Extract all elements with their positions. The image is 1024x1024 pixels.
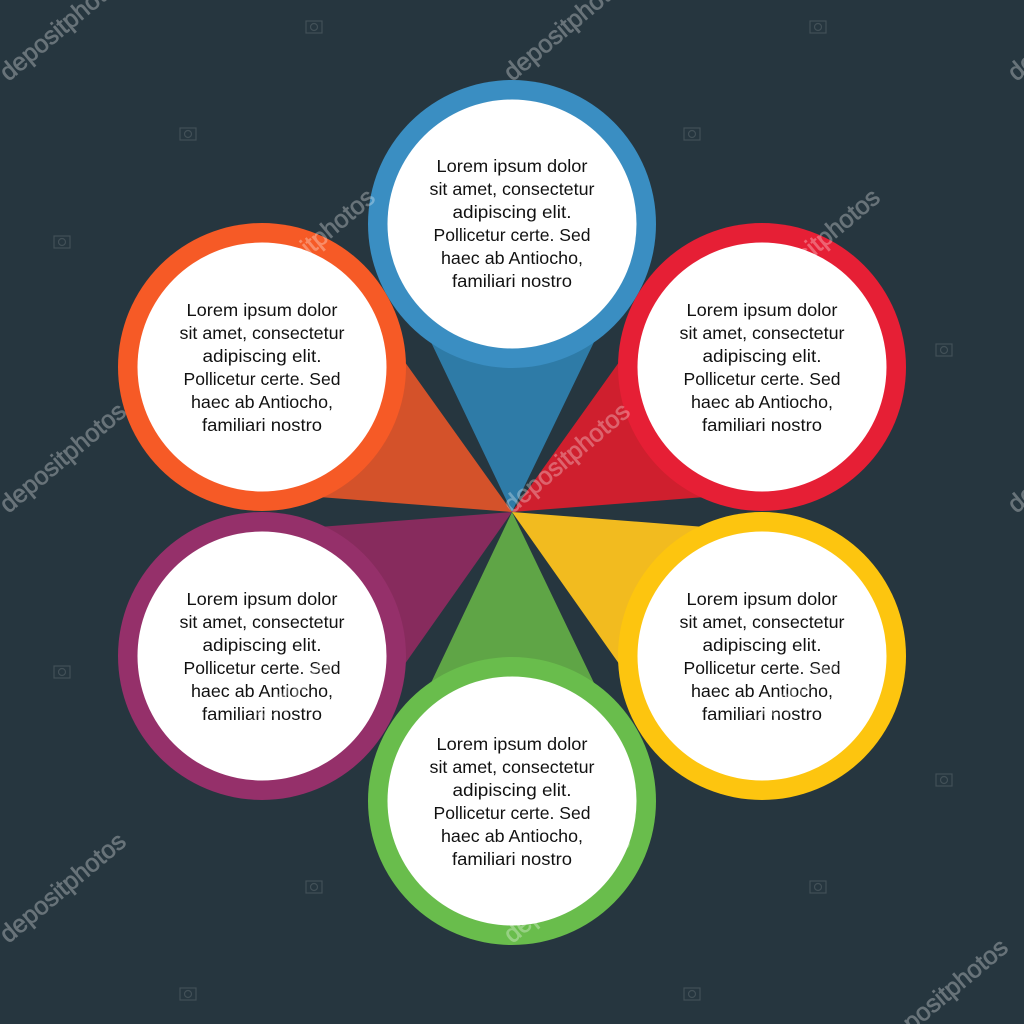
text: purple circle (180, 589, 345, 724)
text: red circle: haec ab Antiocho, (691, 392, 833, 412)
text: green circle: haec ab Antiocho, (441, 826, 583, 846)
wedge: yellow (512, 512, 705, 668)
text: red circle (680, 300, 845, 435)
text: red circle: Lorem ipsum dolor (686, 300, 838, 320)
text: yellow circle (680, 589, 845, 724)
text: red circle: familiari nostro (702, 415, 822, 435)
wedge: orange (319, 358, 512, 512)
circle: blue (368, 80, 656, 368)
wedge: red (512, 358, 705, 512)
watermarks: depositphotos (243, 183, 380, 305)
text: green circle: Pollicetur certe. Sed (434, 803, 590, 823)
text: purple circle: adipiscing elit. (202, 635, 322, 655)
text: orange circle: adipiscing elit. (202, 346, 322, 366)
wedge: blue (430, 340, 595, 512)
watermarks: depositphotos (749, 611, 886, 733)
text: purple circle: sit amet, consectetur (180, 612, 345, 632)
text: orange circle (180, 300, 345, 435)
text: purple circle: Lorem ipsum dolor (186, 589, 338, 609)
text: yellow circle: haec ab Antiocho, (691, 681, 833, 701)
text: blue circle (430, 156, 595, 291)
text: blue circle: sit amet, consectetur (430, 179, 595, 199)
text: blue circle: haec ab Antiocho, (441, 248, 583, 268)
text: orange circle: sit amet, consectetur (180, 323, 345, 343)
text: blue circle: Lorem ipsum dolor (436, 156, 588, 176)
text: purple circle: familiari nostro (202, 704, 322, 724)
text: orange circle: Pollicetur certe. Sed (184, 369, 340, 389)
text: yellow circle: sit amet, consectetur (680, 612, 845, 632)
wedge: purple (319, 512, 512, 668)
text: orange circle: Lorem ipsum dolor (186, 300, 338, 320)
text: blue circle: Pollicetur certe. Sed (434, 225, 590, 245)
text: green circle: familiari nostro (452, 849, 572, 869)
text: yellow circle: Pollicetur certe. Sed (684, 658, 840, 678)
text: green circle: sit amet, consectetur (430, 757, 595, 777)
text: orange circle: haec ab Antiocho, (191, 392, 333, 412)
text: yellow circle: Lorem ipsum dolor (686, 589, 838, 609)
text: red circle: adipiscing elit. (702, 346, 822, 366)
text: purple circle: haec ab Antiocho, (191, 681, 333, 701)
watermarks: depositphotos (245, 611, 382, 733)
wedge: green (430, 512, 595, 685)
circle: purple (118, 512, 406, 800)
watermarks: depositphotos (498, 827, 635, 949)
text: red circle: Pollicetur certe. Sed (684, 369, 840, 389)
circle: red (618, 223, 906, 511)
watermarks: depositphotos (748, 183, 885, 305)
text: purple circle: Pollicetur certe. Sed (184, 658, 340, 678)
circle: green (368, 657, 656, 945)
text: red circle: sit amet, consectetur (680, 323, 845, 343)
text: blue circle: familiari nostro (452, 271, 572, 291)
text: yellow circle: familiari nostro (702, 704, 822, 724)
text: blue circle: adipiscing elit. (452, 202, 572, 222)
circle: orange (118, 223, 406, 511)
text: yellow circle: adipiscing elit. (702, 635, 822, 655)
text: green circle (430, 734, 595, 869)
text: green circle: Lorem ipsum dolor (436, 734, 588, 754)
text: green circle: adipiscing elit. (452, 780, 572, 800)
watermarks: depositphotos (498, 397, 635, 519)
circle: yellow (618, 512, 906, 800)
text: orange circle: familiari nostro (202, 415, 322, 435)
